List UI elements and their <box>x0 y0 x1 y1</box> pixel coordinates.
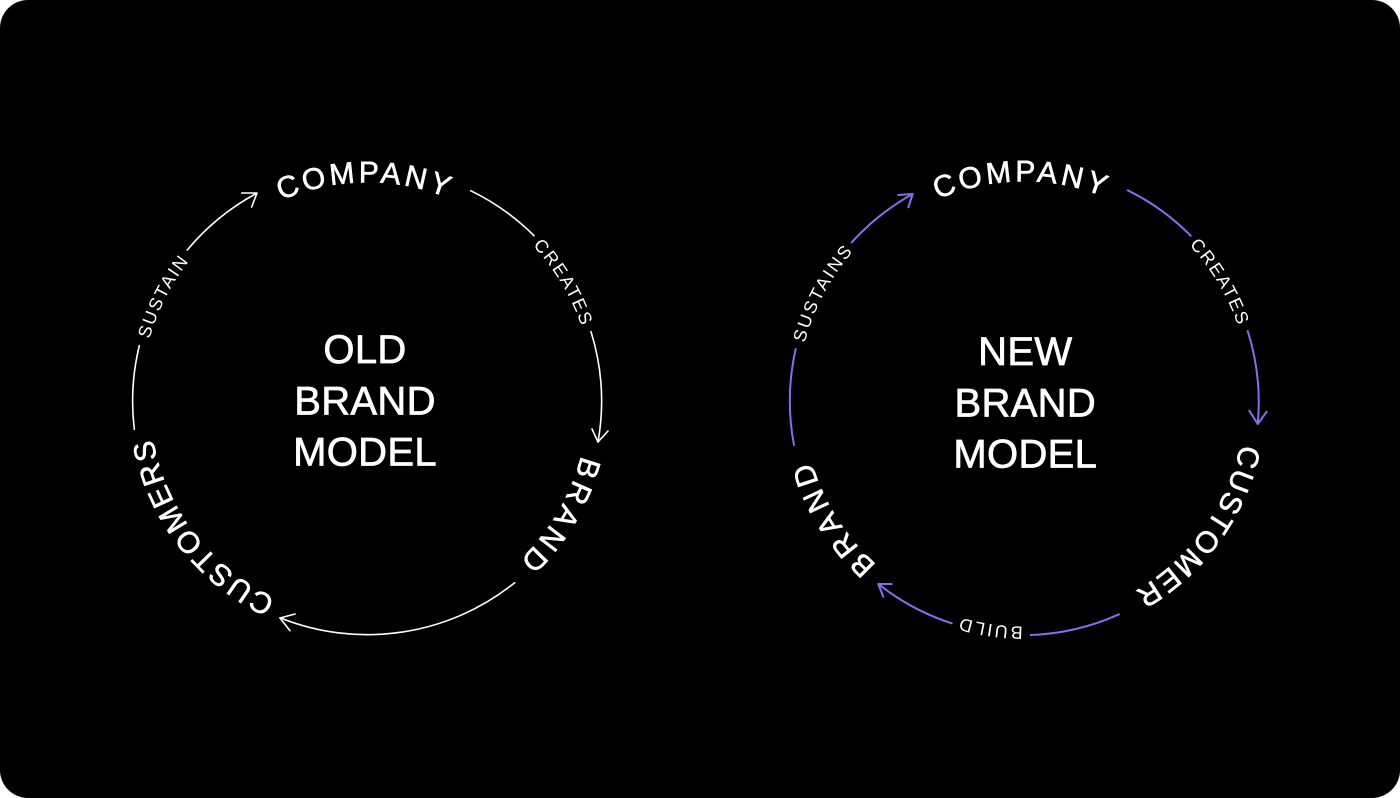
label: sustain: SUSTAIN <box>138 255 188 338</box>
label: company: COMPANY <box>278 162 454 198</box>
arc: customers to sustain <box>133 346 139 429</box>
label: brand: BRAND <box>524 458 601 570</box>
arrow: build to brand <box>878 584 952 623</box>
heading: new brand model: MODEL <box>953 432 1097 476</box>
arc: company to creates <box>1128 190 1191 236</box>
heading: old brand model: MODEL <box>293 430 437 474</box>
arrow: sustains to company <box>852 194 913 242</box>
panel: old brand model <box>132 162 609 636</box>
label: company: COMPANY <box>934 160 1110 196</box>
heading: old brand model: BRAND <box>294 380 436 424</box>
heading: old brand model: OLD <box>323 328 407 372</box>
label: creates: CREATES <box>1192 240 1248 324</box>
arc: customer to build <box>1031 614 1119 635</box>
heading: old brand model <box>293 328 437 474</box>
label: brand: BRAND <box>794 466 876 578</box>
arc: company to creates <box>471 191 534 236</box>
label: customer: CUSTOMER <box>1136 448 1259 606</box>
label: creates: CREATES <box>536 240 592 324</box>
heading: new brand model <box>953 330 1097 476</box>
arrow: creates to brand <box>591 332 608 442</box>
heading: new brand model: NEW <box>978 330 1072 374</box>
arrow: sustain to company <box>187 193 257 250</box>
label: build: BUILD <box>960 619 1022 639</box>
heading: new brand model: BRAND <box>955 382 1096 426</box>
label: sustains: SUSTAINS <box>794 246 851 342</box>
label: customers: CUSTOMERS <box>134 442 272 614</box>
arrow: creates to customer <box>1248 331 1267 424</box>
arc: brand to sustains <box>790 349 796 445</box>
arrow: brand to customers <box>280 583 515 635</box>
panel: new brand model <box>788 160 1268 639</box>
